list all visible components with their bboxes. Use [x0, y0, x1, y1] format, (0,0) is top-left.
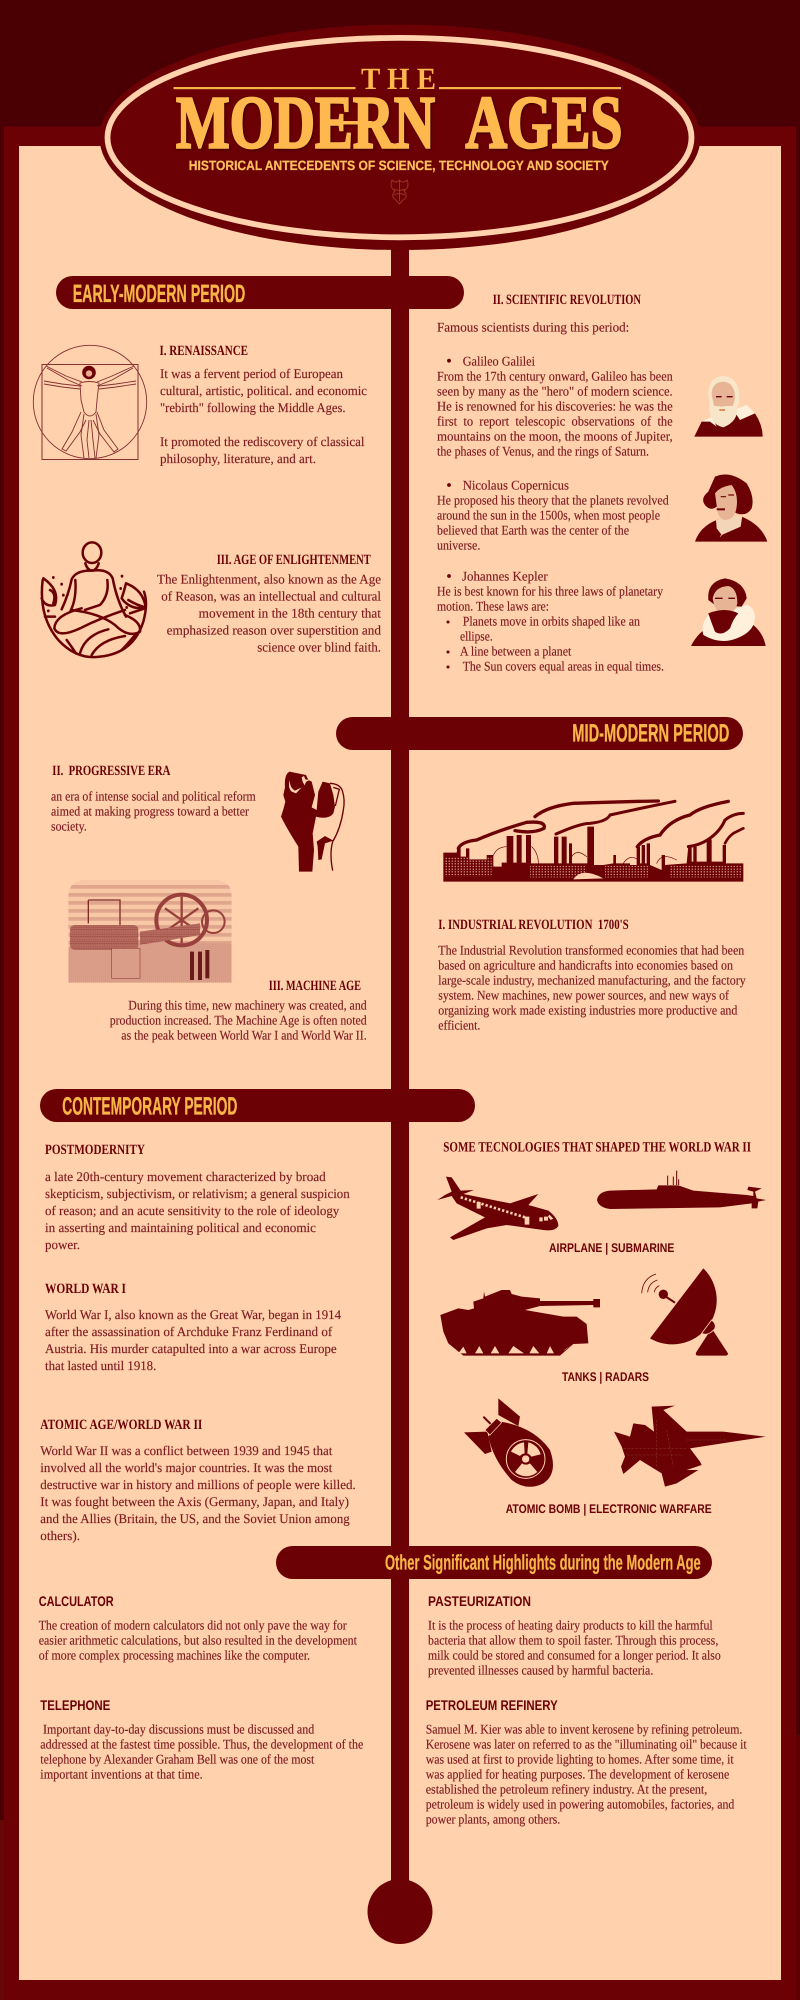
- text: enlightenment body: of Reason, was an intellectual and cultural: [161, 589, 381, 604]
- text: galileo: first to report telescopic observations of the: [437, 413, 673, 428]
- icon: kepler portrait: [691, 578, 766, 646]
- label: tanks radars: TANKS | RADARS: [562, 1370, 649, 1384]
- text: galileo: From the 17th century onward, Galileo has been: [437, 368, 673, 383]
- text: enlightenment body: emphasized reason over superstition and: [167, 623, 381, 638]
- text: calculator body: [39, 1617, 357, 1662]
- icon: vitruvian man: [33, 345, 147, 460]
- text: telephone body: Important day-to-day discussions must be discussed and: [43, 1721, 315, 1736]
- text: renaissance body: [160, 366, 367, 466]
- text: industrial revolution body: based on agriculture and handicrafts into economies based on: [438, 957, 733, 972]
- text: progressive era body: society.: [51, 818, 87, 833]
- text: galileo: He is renowned for his discoveries: he was the: [437, 398, 673, 413]
- icon: ornament: [391, 180, 408, 204]
- text: pasteurization body: milk could be stored and consumed for a longer period. It also: [428, 1647, 721, 1662]
- text: industrial revolution body: efficient.: [438, 1017, 480, 1032]
- text: petroleum refinery body: Samuel M. Kier was able to invent kerosene by refining petroleum.: [426, 1721, 742, 1736]
- text: copernicus: around the sun in the 1500s, when most people: [437, 508, 660, 523]
- text: enlightenment body: science over blind faith.: [257, 640, 381, 655]
- section bar: contemporary period: CONTEMPORARY PERIOD: [62, 1093, 237, 1121]
- heading: renaissance: I. RENAISSANCE: [160, 343, 248, 359]
- heading: petroleum refinery: PETROLEUM REFINERY: [426, 1697, 558, 1713]
- icon: factory skyline: [443, 801, 743, 882]
- subtitle: HISTORICAL ANTECEDENTS OF SCIENCE, TECHNOLOGY AND SOCIETY: [189, 158, 609, 173]
- icon: radar: [642, 1268, 728, 1356]
- text: postmodernity body: in asserting and maintaining political and economic: [45, 1220, 316, 1235]
- text: copernicus: believed that Earth was the center of the: [437, 523, 629, 538]
- text: enlightenment body: The Enlightenment, also known as the Age: [157, 572, 381, 587]
- heading: machine age: III. MACHINE AGE: [269, 978, 361, 994]
- text: enlightenment body: [157, 572, 381, 655]
- text: calculator body: The creation of modern calculators did not only pave the way for: [39, 1617, 347, 1632]
- section bar: other highlights: [276, 1546, 712, 1579]
- section bar: contemporary period: [40, 1089, 475, 1122]
- heading: industrial revolution: I. INDUSTRIAL REVOLUTION 1700'S: [438, 917, 629, 933]
- heading: telephone: TELEPHONE: [40, 1697, 110, 1713]
- text: machine age body: as the peak between World War I and World War II.: [121, 1027, 367, 1042]
- text: renaissance body: It was a fervent period of European: [160, 366, 343, 381]
- text: copernicus: Nicolaus Copernicus: [463, 477, 569, 492]
- text: renaissance body: philosophy, literature, and art.: [160, 451, 316, 466]
- text: kepler: A line between a planet: [460, 643, 572, 658]
- text: petroleum refinery body: [426, 1721, 747, 1826]
- heading: age of enlightenment: III. AGE OF ENLIGHTENMENT: [217, 552, 371, 568]
- text: pasteurization body: bacteria that allow them to spoil faster. Through this process,: [428, 1632, 718, 1647]
- label: airplane submarine: AIRPLANE | SUBMARINE: [549, 1241, 674, 1255]
- icon: fighter jet: [614, 1406, 766, 1487]
- icon: airplane: [437, 1177, 558, 1240]
- section bar: early-modern period: EARLY-MODERN PERIOD: [73, 280, 245, 308]
- text: petroleum refinery body: power plants, among others.: [426, 1811, 560, 1826]
- text: atomic age body: It was fought between the Axis (Germany, Japan, and Italy): [40, 1494, 349, 1509]
- title: modern ages: AGES: [466, 82, 622, 164]
- text: telephone body: addressed at the fastest time possible. Thus, the development of the: [40, 1736, 363, 1751]
- timeline end circle: [368, 1879, 432, 1944]
- text: renaissance body: It promoted the rediscovery of classical: [160, 434, 365, 449]
- icon: raised fist: [281, 772, 344, 872]
- text: progressive era body: [51, 788, 256, 833]
- emblem oval: [100, 25, 700, 250]
- image: machine engraving: [68, 880, 232, 983]
- text: world war i body: that lasted until 1918.: [45, 1358, 156, 1373]
- text: telephone body: important inventions at that time.: [40, 1766, 203, 1781]
- text: copernicus: [437, 477, 669, 553]
- title: the: T H E: [361, 61, 436, 96]
- text: postmodernity body: [45, 1169, 350, 1252]
- text: copernicus: universe.: [437, 538, 480, 553]
- heading: world war i: WORLD WAR I: [45, 1281, 126, 1297]
- heading: postmodernity: POSTMODERNITY: [45, 1142, 145, 1158]
- icon: atomic bomb: [464, 1398, 553, 1487]
- text: renaissance body: "rebirth" following the Middle Ages.: [160, 400, 346, 415]
- text: petroleum refinery body: Kerosene was later on referred to as the "illuminating oil" because it: [426, 1736, 747, 1751]
- text: telephone body: [40, 1721, 363, 1781]
- text: industrial revolution body: The Industrial Revolution transformed economies that had been: [438, 942, 745, 957]
- text: postmodernity body: of reason; and an acute sensitivity to the role of ideology: [45, 1203, 340, 1218]
- text: industrial revolution body: [438, 942, 746, 1032]
- text: kepler: [437, 568, 664, 673]
- text: progressive era body: an era of intense social and political reform: [51, 788, 256, 803]
- text: copernicus: He proposed his theory that the planets revolved: [437, 493, 669, 508]
- text: kepler: ellipse.: [460, 628, 493, 643]
- section bar: mid-modern period: [336, 717, 743, 750]
- text: world war i body: after the assassination of Archduke Franz Ferdinand of: [45, 1324, 333, 1339]
- text: pasteurization body: It is the process of heating dairy products to kill the harmful: [428, 1617, 713, 1632]
- text: galileo: mountains on the moon, the moons of Jupiter,: [437, 428, 673, 443]
- text: world war i body: Austria. His murder catapulted into a war across Europe: [45, 1341, 337, 1356]
- text: kepler: motion. These laws are:: [437, 598, 549, 613]
- text: industrial revolution body: system. New machines, new power sources, and new ways of: [438, 987, 730, 1002]
- text: machine age body: [110, 997, 367, 1042]
- text: galileo: Galileo Galilei: [463, 353, 535, 368]
- icon: meditating figure: [42, 542, 146, 657]
- text: kepler: Johannes Kepler: [462, 568, 548, 583]
- icon: galileo portrait: [694, 376, 763, 437]
- text: kepler: He is best known for his three laws of planetary: [437, 583, 663, 598]
- text: famous scientists intro: Famous scientists during this period:: [437, 319, 629, 334]
- text: renaissance body: cultural, artistic, political. and economic: [160, 383, 367, 398]
- icon: copernicus portrait: [695, 474, 767, 542]
- text: atomic age body: involved all the world's major countries. It was the most: [40, 1460, 333, 1475]
- text: industrial revolution body: organizing work made existing industries more productive and: [438, 1002, 738, 1017]
- text: pasteurization body: prevented illnesses caused by harmful bacteria.: [428, 1662, 653, 1677]
- text: machine age body: During this time, new machinery was created, and: [128, 997, 367, 1012]
- text: kepler: The Sun covers equal areas in equal times.: [463, 658, 664, 673]
- heading: scientific revolution: II. SCIENTIFIC REVOLUTION: [493, 292, 642, 308]
- heading: atomic age: ATOMIC AGE/WORLD WAR II: [40, 1417, 203, 1433]
- label: atomic bomb electronic warfare: ATOMIC BOMB | ELECTRONIC WARFARE: [506, 1502, 712, 1516]
- text: postmodernity body: skepticism, subjectivism, or relativism; a general suspicion: [45, 1186, 350, 1201]
- text: petroleum refinery body: petroleum is widely used in powering automobiles, factories, and: [426, 1796, 735, 1811]
- text: progressive era body: aimed at making progress toward a better: [51, 803, 250, 818]
- timeline spine: [391, 240, 409, 1900]
- text: galileo: seen by many as the "hero" of modern science.: [437, 383, 673, 398]
- text: industrial revolution body: large-scale industry, mechanized manufacturing, and the factory: [438, 972, 746, 987]
- text: enlightenment body: movement in the 18th century that: [199, 606, 381, 621]
- text: machine age body: production increased. The Machine Age is often noted: [110, 1012, 367, 1027]
- heading: pasteurization: PASTEURIZATION: [428, 1593, 531, 1609]
- text: calculator body: easier arithmetic calculations, but also resulted in the development: [39, 1632, 357, 1647]
- icon: submarine: [597, 1171, 766, 1209]
- text: atomic age body: [40, 1443, 356, 1543]
- text: atomic age body: and the Allies (Britain, the US, and the Soviet Union among: [40, 1511, 350, 1526]
- text: petroleum refinery body: was used at first to provide lighting to homes. After some time, it: [426, 1751, 734, 1766]
- text: atomic age body: others).: [40, 1528, 80, 1543]
- title: modern ages: MODERN: [176, 82, 435, 164]
- text: galileo: [437, 353, 673, 458]
- text: kepler: Planets move in orbits shaped like an: [463, 613, 640, 628]
- section bar: early-modern period: [56, 276, 464, 309]
- text: petroleum refinery body: established the petroleum refinery industry. At the present,: [426, 1781, 707, 1796]
- text: postmodernity body: a late 20th-century movement characterized by broad: [45, 1169, 326, 1184]
- text: petroleum refinery body: was applied for heating purposes. The development of kerosene: [426, 1766, 729, 1781]
- title emblem: [100, 25, 700, 250]
- heading: progressive era: II. PROGRESSIVE ERA: [52, 763, 171, 779]
- heading: calculator: CALCULATOR: [39, 1593, 114, 1609]
- text: pasteurization body: [428, 1617, 721, 1677]
- emblem ring: [108, 38, 692, 237]
- text: world war i body: World War I, also known as the Great War, began in 1914: [45, 1307, 341, 1322]
- icon: tank: [440, 1290, 600, 1356]
- text: galileo: the phases of Venus, and the rings of Saturn.: [437, 443, 649, 458]
- text: calculator body: of more complex processing machines like the computer.: [39, 1647, 310, 1662]
- text: telephone body: telephone by Alexander Graham Bell was one of the most: [40, 1751, 315, 1766]
- text: atomic age body: destructive war in history and millions of people were killed.: [40, 1477, 356, 1492]
- text: world war i body: [45, 1307, 341, 1373]
- text: postmodernity body: power.: [45, 1237, 80, 1252]
- text: atomic age body: World War II was a conflict between 1939 and 1945 that: [40, 1443, 333, 1458]
